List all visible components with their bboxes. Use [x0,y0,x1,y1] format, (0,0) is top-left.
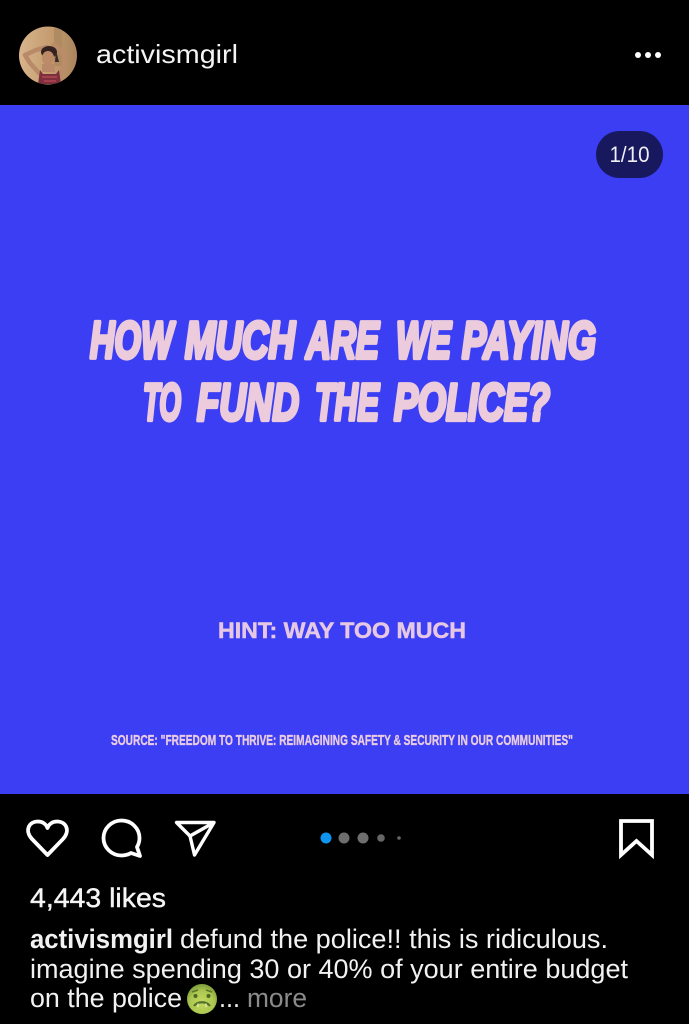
caption [30,924,628,1014]
title: THE [315,374,380,432]
likes count: 4,443 likes [30,883,166,913]
caption: imagine spending 30 or 40% of your entire budget [30,954,628,984]
icon: share [176,822,214,855]
action bar [28,820,652,856]
slide counter badge: 1/10 [610,142,650,167]
icon: bookmark [621,821,652,855]
hint text: HINT: WAY TOO MUCH [218,618,466,643]
title: ARE [305,312,380,370]
avatar [19,26,77,84]
caption: on the police [30,983,182,1013]
title: PAYING [462,312,596,370]
title: FUND [197,374,299,432]
icon: heart [28,822,67,855]
icon: sick emoji [187,984,217,1014]
title: TO [143,374,181,432]
title: MUCH [185,312,296,370]
caption: defund the police!! this is ridiculous. [180,924,608,954]
icon: comment [104,820,140,856]
caption: activismgirl [30,924,173,954]
title [90,312,596,432]
caption: more [247,983,307,1013]
caption: ... [219,983,240,1013]
title: WE [396,312,452,370]
title: HOW [90,312,176,370]
title: POLICE? [394,374,550,432]
panel: slide [0,105,689,794]
slide counter badge [596,131,663,178]
carousel dots [320,832,401,844]
username: activismgirl [96,39,238,69]
icon: more menu [635,52,661,58]
header bar [19,26,661,84]
